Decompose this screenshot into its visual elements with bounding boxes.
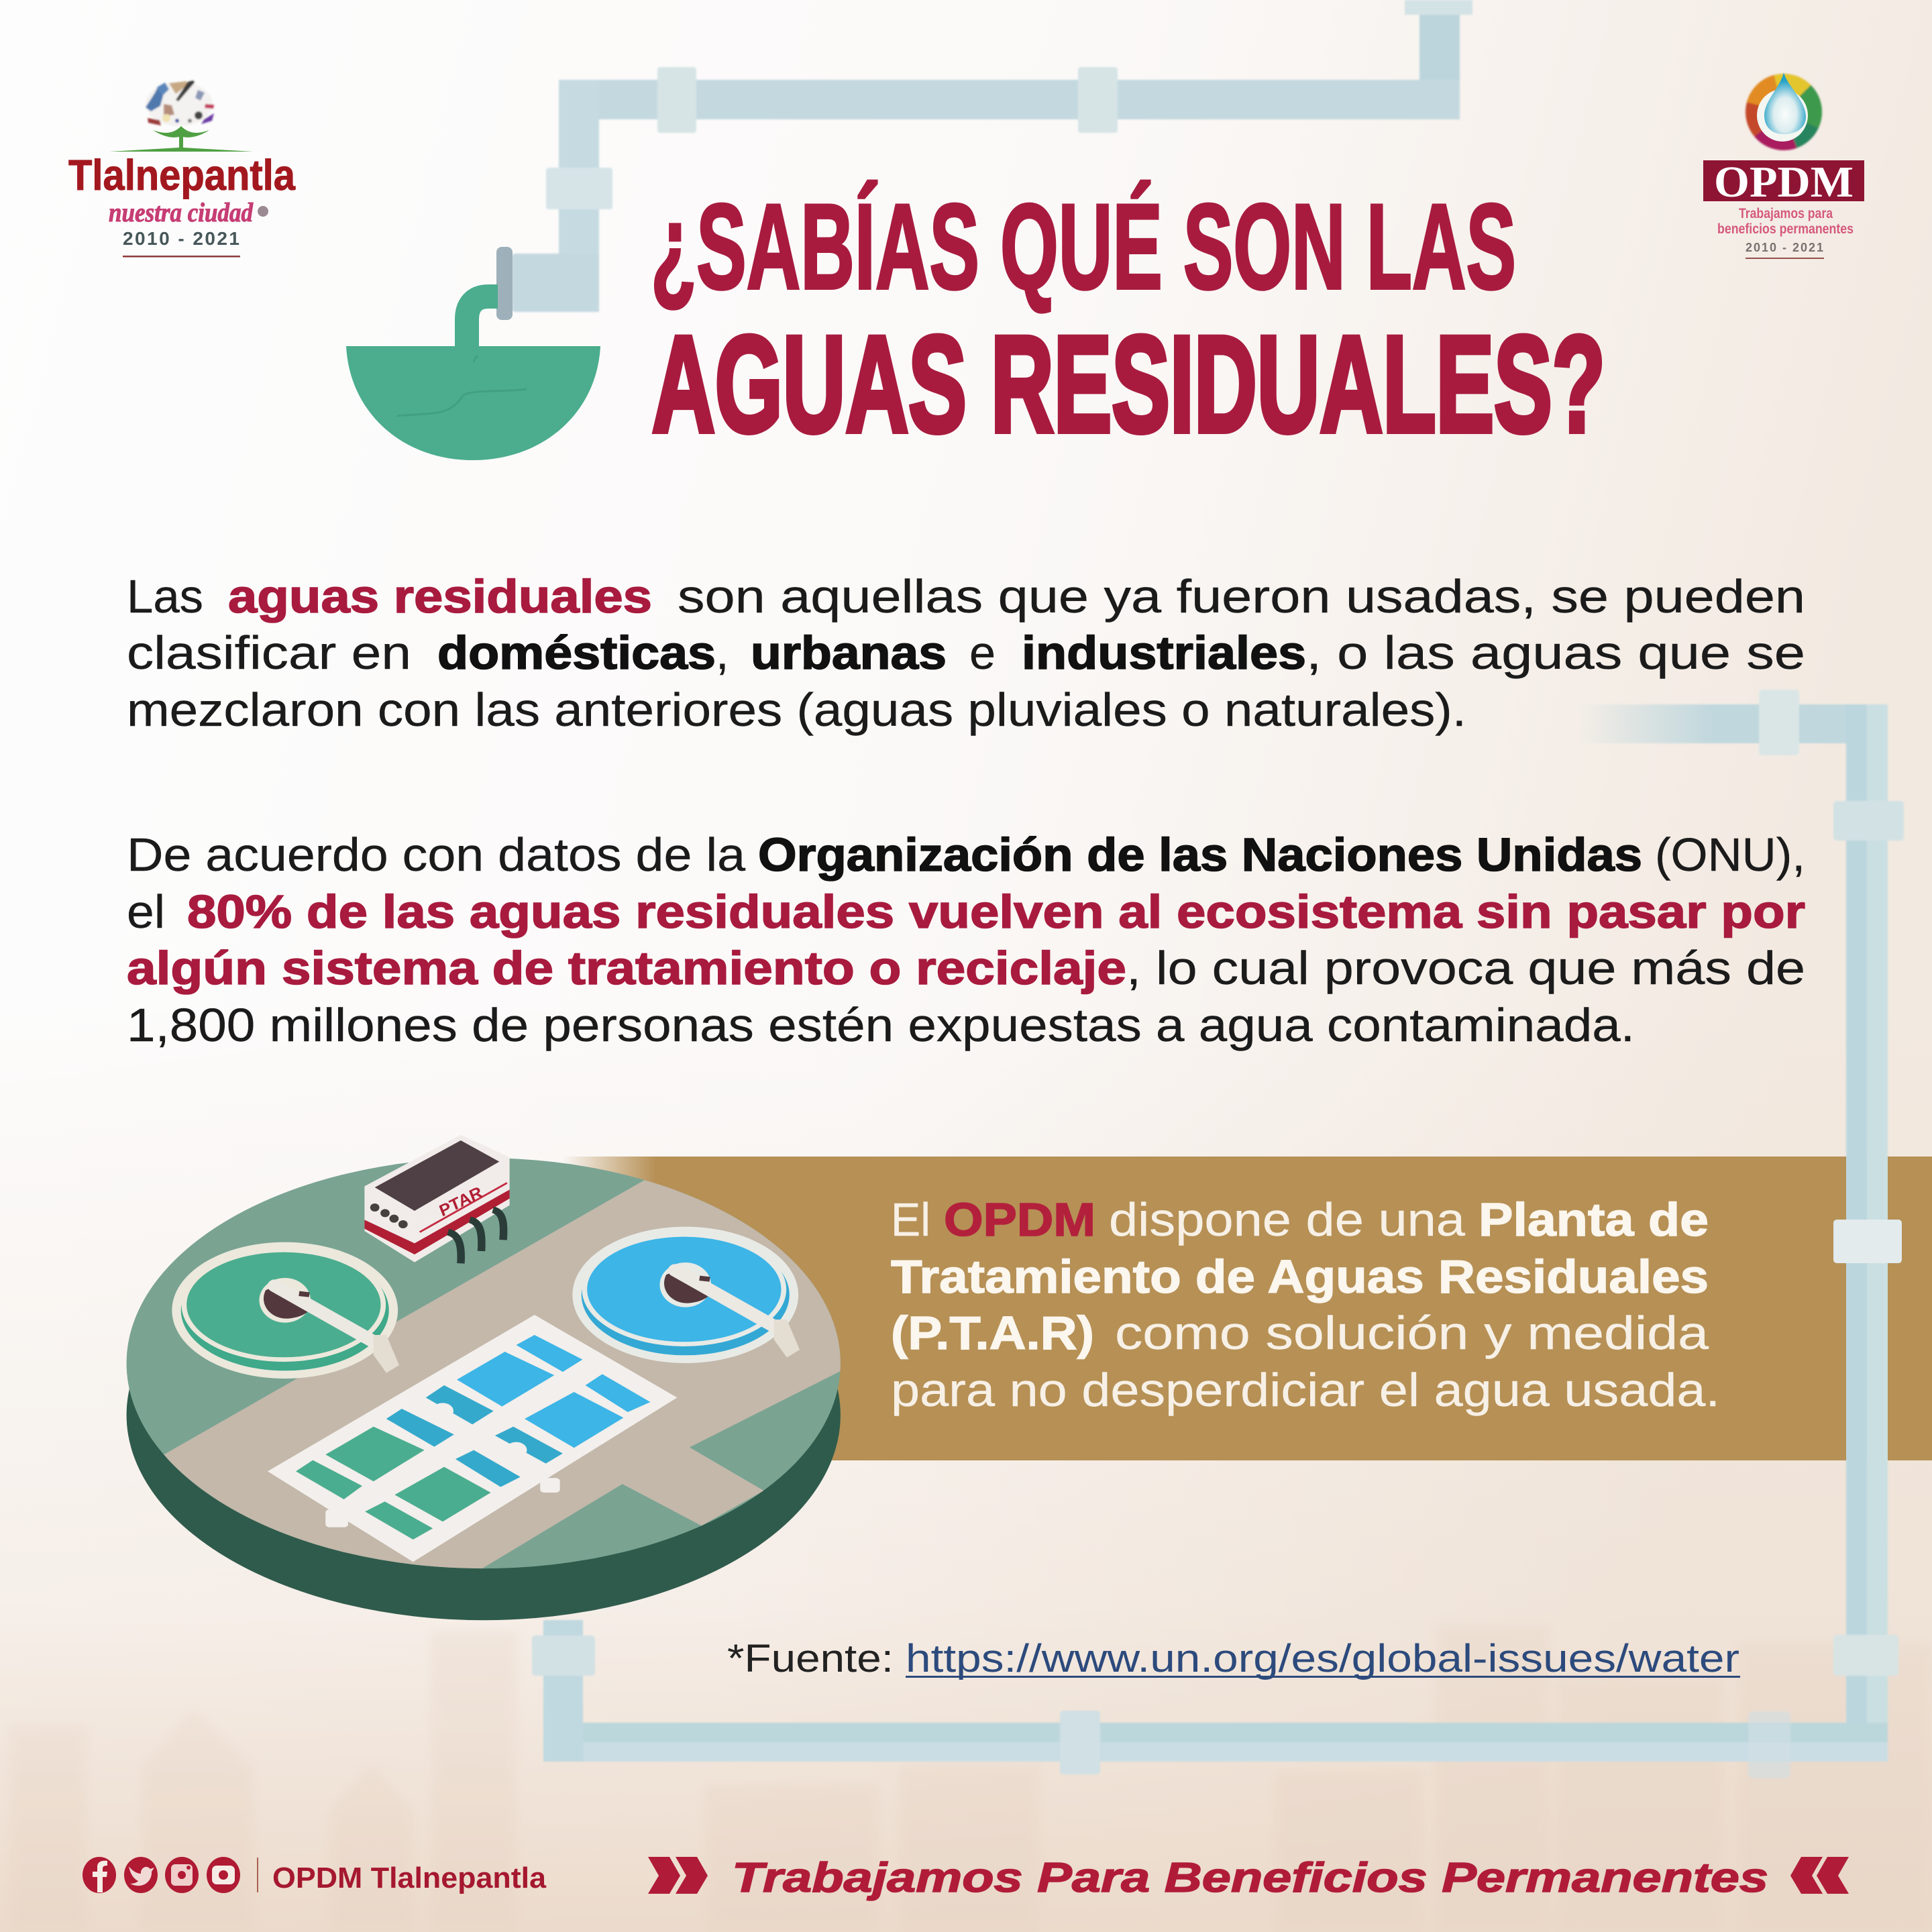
logo slogan: Trabajamos para xyxy=(1739,206,1833,221)
building xyxy=(364,1135,510,1263)
faded city silhouette xyxy=(9,1623,1932,1932)
footer divider xyxy=(257,1858,258,1892)
icon: right chevrons xyxy=(1790,1857,1849,1894)
logo name: OPDM xyxy=(1714,158,1854,207)
disc top xyxy=(127,1158,841,1568)
callout text: El xyxy=(891,1193,930,1246)
brown callout band xyxy=(562,1157,1932,1460)
paragraph: UN data: Organización de las Naciones Unidas xyxy=(758,828,1642,881)
icon: tree crown xyxy=(146,80,214,126)
icon: pipe flange xyxy=(496,247,513,320)
paragraph: UN data: 1,800 millones de personas estén expuestas a agua contaminada. xyxy=(127,999,1635,1051)
social icons xyxy=(83,1857,240,1893)
green clarifier xyxy=(172,1242,399,1379)
footer handle: OPDM Tlalnepantla xyxy=(272,1862,547,1894)
callout text: Planta de xyxy=(1479,1193,1709,1246)
paragraph: UN data xyxy=(127,828,1805,1051)
paragraph: definition: aguas residuales xyxy=(228,570,652,623)
paragraph: definition: son aquellas que ya fueron usadas, se pueden xyxy=(678,570,1805,623)
paragraph: definition: Las xyxy=(127,570,203,623)
icon: facebook xyxy=(83,1857,116,1893)
icon: tree stem xyxy=(109,126,253,152)
rectangular tanks xyxy=(268,1315,677,1562)
paragraph: UN data: algún sistema de tratamiento o reciclaje xyxy=(127,942,1126,994)
callout text: para no desperdiciar el agua usada. xyxy=(891,1364,1720,1416)
road xyxy=(107,1181,855,1569)
paragraph: UN data: , lo cual provoca que más de xyxy=(1126,942,1805,994)
paragraph: definition: , o las aguas que se xyxy=(1306,627,1805,679)
blue clarifier xyxy=(572,1227,800,1363)
logo: Tlalnepantla xyxy=(68,80,295,258)
callout text xyxy=(891,1193,1720,1416)
paragraph: definition: domésticas xyxy=(437,627,716,679)
icon: green water bowl and stream xyxy=(346,297,600,460)
logo dot xyxy=(258,206,268,217)
source citation: *Fuente: xyxy=(727,1637,894,1680)
paragraph: definition: , xyxy=(716,627,729,679)
pipe: top network xyxy=(512,0,1472,312)
source citation: https://www.un.org/es/global-issues/water xyxy=(906,1637,1739,1680)
callout text: como solución y medida xyxy=(1115,1307,1709,1359)
title xyxy=(651,179,1605,461)
building: PTAR xyxy=(435,1184,486,1220)
logo slogan: beneficios permanentes xyxy=(1717,221,1854,237)
callout text: OPDM xyxy=(944,1193,1095,1246)
logo underline xyxy=(1746,258,1824,259)
logo years: 2010 - 2021 xyxy=(1746,241,1823,254)
callout text: (P.T.A.R) xyxy=(891,1307,1094,1359)
logo slogan xyxy=(1717,206,1854,237)
pipe: right and bottom network xyxy=(532,690,1904,1778)
logo tagline: nuestra ciudad xyxy=(109,197,254,227)
disc base xyxy=(127,1210,841,1620)
paragraph: UN data: (ONU), xyxy=(1655,828,1805,881)
paragraph: definition: e xyxy=(969,627,996,679)
paragraph: definition: industriales xyxy=(1022,627,1306,679)
callout text: dispone de una xyxy=(1109,1193,1465,1246)
callout text: Tratamiento de Aguas Residuales xyxy=(891,1250,1709,1303)
logo wordmark: Tlalnepantla xyxy=(68,151,295,199)
icon: youtube xyxy=(207,1857,240,1893)
paragraph: definition xyxy=(127,570,1805,736)
icon: left chevrons xyxy=(648,1857,708,1894)
icon: instagram xyxy=(165,1857,199,1893)
paragraph: definition: mezclaron con las anteriores (aguas pluviales o naturales). xyxy=(127,684,1466,736)
illustration: treatment plant xyxy=(107,1135,855,1620)
icon: water drop xyxy=(1757,72,1808,142)
footer slogan: Trabajamos Para Beneficios Permanentes xyxy=(732,1855,1768,1901)
paragraph: UN data: De acuerdo con datos de la xyxy=(127,828,745,881)
paragraph: definition: clasificar en xyxy=(127,627,411,679)
disc with road xyxy=(107,1158,855,1620)
logo: OPDM xyxy=(1703,72,1864,259)
logo name plate xyxy=(1703,160,1864,201)
paragraph: UN data: 80% de las aguas residuales vuelven al ecosistema sin pasar por xyxy=(187,885,1805,938)
paragraph: UN data: el xyxy=(127,885,165,938)
icon: rainbow ring xyxy=(1757,85,1811,139)
logo underline xyxy=(123,256,240,258)
paragraph: definition: urbanas xyxy=(751,627,947,679)
logo years: 2010 - 2021 xyxy=(123,228,239,249)
icon: twitter xyxy=(124,1857,158,1893)
